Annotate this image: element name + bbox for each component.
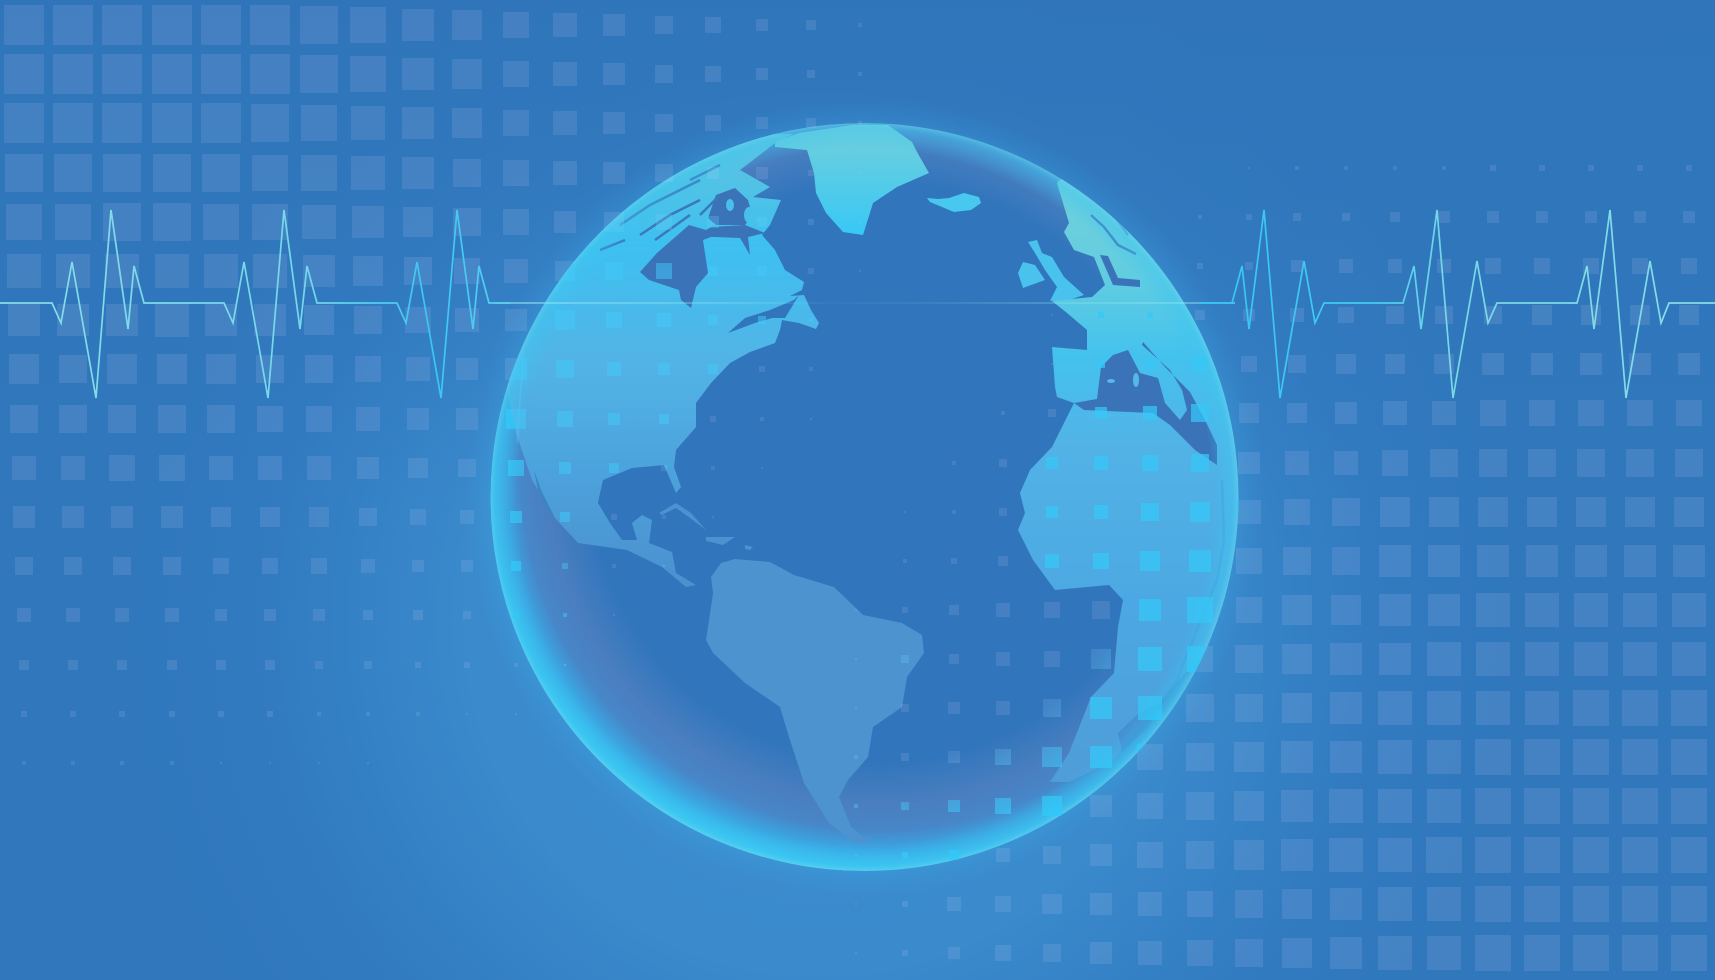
Ireland [1018,262,1045,288]
North America [505,134,819,587]
rim highlight [490,123,1238,871]
Greenland [775,125,929,235]
globe outer glow [464,97,1264,897]
globe [490,123,1250,871]
heartbeat line left [0,210,510,398]
Caribbean islands [659,503,753,550]
inner sphere reflection [517,277,1224,760]
Iceland [927,193,981,212]
grid squares lit through the globe [506,214,1238,860]
heartbeat line right [1200,210,1715,398]
South America [706,559,924,843]
Europe and Africa [1018,179,1238,782]
horizontal pulse line across globe [495,302,1235,304]
ocean sphere [490,126,1137,871]
Britain [1028,240,1084,301]
